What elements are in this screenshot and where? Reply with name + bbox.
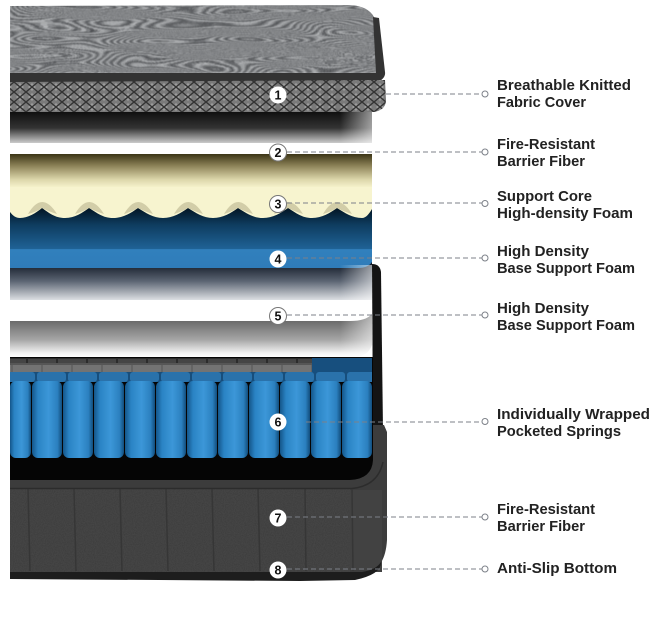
label 7: Fire-Resistant: [497, 501, 595, 518]
label 5: Base Support Foam: [497, 317, 635, 334]
label 6: Pocketed Springs: [497, 423, 621, 440]
label 1: Fabric Cover: [497, 94, 586, 111]
label 2: Fire-Resistant: [497, 136, 595, 153]
label 4: High Density: [497, 243, 590, 260]
layer 5: high density base foam: [10, 262, 372, 357]
foam egg-crate scallops: [10, 198, 372, 218]
number badge 5: 5: [275, 310, 282, 324]
label 2: [497, 136, 595, 170]
layer 1: diamond fabric band: [10, 80, 386, 112]
leader end markers: [482, 91, 488, 572]
number badge 8: 8: [275, 564, 282, 578]
label 6: Individually Wrapped: [497, 406, 650, 423]
mattress cross-section illustration: [10, 5, 387, 581]
number badge 3: 3: [275, 198, 282, 212]
layer 2: fire-resistant barrier fiber: [10, 112, 372, 154]
layer 8: anti-slip bottom: [10, 562, 381, 581]
label 2: Barrier Fiber: [497, 153, 585, 170]
label 3: [497, 188, 633, 222]
number badge 3: [270, 196, 286, 212]
number badge 2: 2: [275, 146, 282, 160]
label 4: [497, 243, 635, 277]
cover border piping: [10, 17, 385, 82]
number badge 8: [270, 562, 286, 578]
label 3: Support Core: [497, 188, 592, 205]
label 5: [497, 300, 635, 334]
number badge 4: [270, 250, 286, 268]
layer 6: pocketed springs: [10, 357, 373, 480]
base frame side: [372, 264, 383, 430]
number badge 6: 6: [275, 416, 282, 430]
label 6: [497, 406, 650, 440]
layer 4: high density base foam: [10, 206, 372, 268]
number badge 2: [270, 144, 286, 161]
number badge 5: [270, 308, 286, 324]
label 1: Breathable Knitted: [497, 77, 631, 94]
label 3: High-density Foam: [497, 205, 633, 222]
number badge 7: [270, 510, 286, 526]
label 1: [497, 77, 631, 111]
label 7: [497, 501, 595, 535]
number badge 1: [270, 86, 286, 104]
number badge 7: 7: [275, 512, 282, 526]
label 8: Anti-Slip Bottom: [497, 560, 617, 577]
label 5: High Density: [497, 300, 590, 317]
leader lines: [287, 94, 482, 569]
number badge 1: 1: [275, 88, 282, 102]
layer: cover top quilted fabric: [10, 5, 378, 73]
number badge 6: [270, 414, 286, 430]
layer 7: base border fabric: [10, 425, 387, 572]
label 4: Base Support Foam: [497, 260, 635, 277]
layer 3: support core foam: [10, 154, 372, 207]
number badge 4: 4: [275, 252, 282, 266]
label 7: Barrier Fiber: [497, 518, 585, 535]
